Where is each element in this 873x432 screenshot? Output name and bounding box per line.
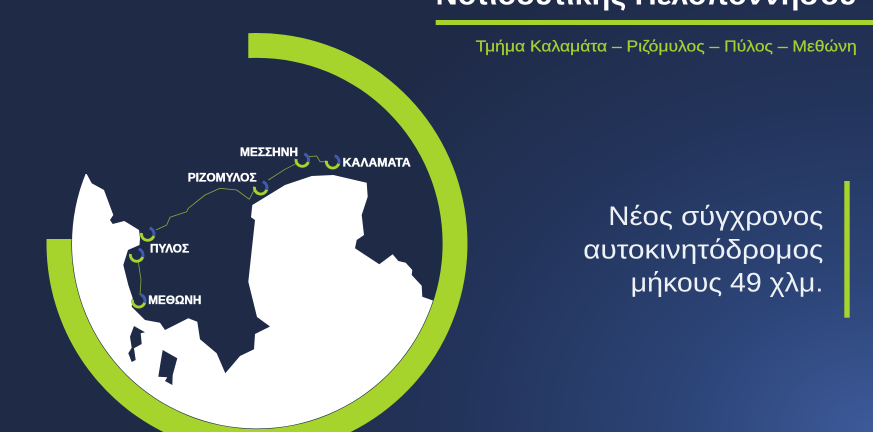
- description text: Νέος σύγχρονος: [608, 201, 823, 231]
- map of south-west Peloponnese: [70, 58, 445, 431]
- land disc: [71, 58, 443, 429]
- marker: Rizomylos: [254, 182, 267, 194]
- marker: Pylos: [130, 249, 143, 261]
- marker: Messini: [296, 154, 309, 166]
- label: Pylos: ΠΥΛΟΣ: [150, 242, 189, 256]
- vertical accent bar: [844, 181, 850, 318]
- sea: [70, 174, 445, 431]
- island: Schiza: [158, 350, 177, 385]
- island: Sapientza: [128, 326, 145, 362]
- marker: Methoni: [132, 295, 145, 307]
- description text: μήκους 49 χλμ.: [631, 268, 823, 298]
- label: Rizomylos: ΡΙΖΟΜΥΛΟΣ: [188, 171, 257, 185]
- marker: route west: [141, 228, 154, 240]
- label: Messini: ΜΕΣΣΗΝΗ: [240, 145, 298, 159]
- description text: [583, 201, 823, 298]
- description text: αυτοκινητόδρομος: [583, 234, 823, 264]
- title underline: [436, 20, 873, 25]
- label: Methoni: ΜΕΘΩΝΗ: [148, 293, 201, 307]
- label: Kalamata: ΚΑΛΑΜΑΤΑ: [343, 156, 411, 170]
- marker: Kalamata: [326, 156, 339, 168]
- green ring around map: [47, 33, 467, 432]
- route line: [138, 156, 326, 295]
- subtitle: Τμήμα Καλαμάτα – Ριζόμυλος – Πύλος – Μεθώνη: [476, 39, 857, 56]
